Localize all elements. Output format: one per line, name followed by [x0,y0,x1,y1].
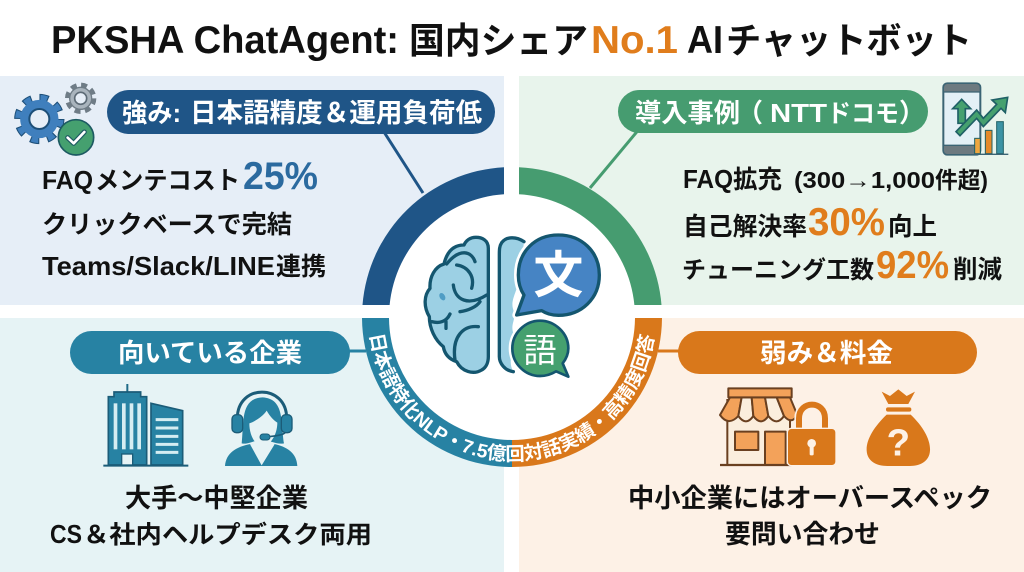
text: case study list: 自己解決率 [683,213,807,241]
text: strengths list [42,155,326,281]
heading: case study: （ [737,98,763,128]
heading: strengths: 強み: [122,98,181,128]
title: 国内シェア [409,20,588,61]
icon: shop with lock [720,388,836,466]
heading: weaknesses: 弱み＆料金 [760,338,893,368]
text: case study list: FAQ [683,164,733,194]
heading: case study: ） [899,98,925,128]
title: PKSHA ChatAgent: [51,19,399,62]
text: weaknesses [628,483,992,549]
text: target companies: CS [50,519,82,549]
curved ring text: 日本語特化NLP・7.5億回対話実績・高精度回答 [368,334,655,462]
icon: speech bubble 語: 語 [523,333,557,370]
connector: case study [590,128,640,188]
icon: brain [425,237,524,372]
heading: case study: ドコモ [827,100,899,128]
ring segment: case study [519,167,662,305]
icon: gears with check [19,86,94,155]
title [51,19,972,62]
ring segment: target companies [362,318,512,467]
icon: speech bubble 語 [512,321,568,377]
title: チャットボット [726,20,972,61]
text: strengths list: 25% [243,155,318,198]
heading: case study [618,90,928,133]
text: target companies: ＆社内ヘルプデスク両用 [83,520,372,549]
connector: weaknesses [658,350,690,352]
panel: target companies [0,318,504,572]
icon: office buildings [103,384,188,466]
panel: case study [519,76,1024,305]
central ring [362,167,662,467]
text: case study list: 削減 [953,256,1002,284]
text: strengths list: クリックベースで完結 [42,211,292,239]
title: No.1 [591,19,678,62]
connector: target companies [335,350,366,352]
text: target companies [50,483,372,549]
text: strengths list: 連携 [276,253,326,281]
panel: weaknesses and pricing [519,318,1024,572]
text: weaknesses: 中小企業にはオーバースペック [628,483,992,513]
text: case study list [682,164,1002,287]
text: case study list: 向上 [888,213,937,241]
text: strengths list: FAQ [42,165,93,195]
title: AI [687,19,723,62]
text: strengths list: メンテコスト [95,167,240,195]
heading: target companies: 向いている企業 [118,338,302,368]
text: case study list: 拡充 [733,166,782,194]
text: case study list: (300→1,000 [794,167,935,193]
text: target companies: 大手〜中堅企業 [125,483,308,513]
heading: case study: 導入事例 [635,98,740,128]
icon: money bag with question mark [867,389,930,466]
ring segment: strengths [362,167,504,305]
heading: weaknesses [678,331,977,374]
icon: phone with growth chart [943,83,1008,155]
heading: case study: NTT [770,98,827,128]
connector: strengths [384,132,423,193]
heading: target companies [70,331,350,374]
icon: support agent with headset [225,392,297,466]
panel: strengths [0,76,504,305]
icon: speech bubble 文 [517,235,599,315]
text: case study list: 92% [876,244,949,287]
text: case study list: 30% [808,201,885,244]
icon: speech bubble 文: 文 [533,248,583,304]
icon: money bag with question mark: ? [887,421,910,464]
text: weaknesses: 要問い合わせ [725,519,880,549]
text: case study list: 件超) [935,167,988,193]
text: case study list: チューニング工数 [682,256,874,284]
text: strengths list: Teams/Slack/LINE [42,251,275,281]
ring segment: weaknesses [512,318,662,467]
heading: strengths: 日本語精度＆運用負荷低 [190,98,483,128]
heading: strengths [107,90,495,134]
